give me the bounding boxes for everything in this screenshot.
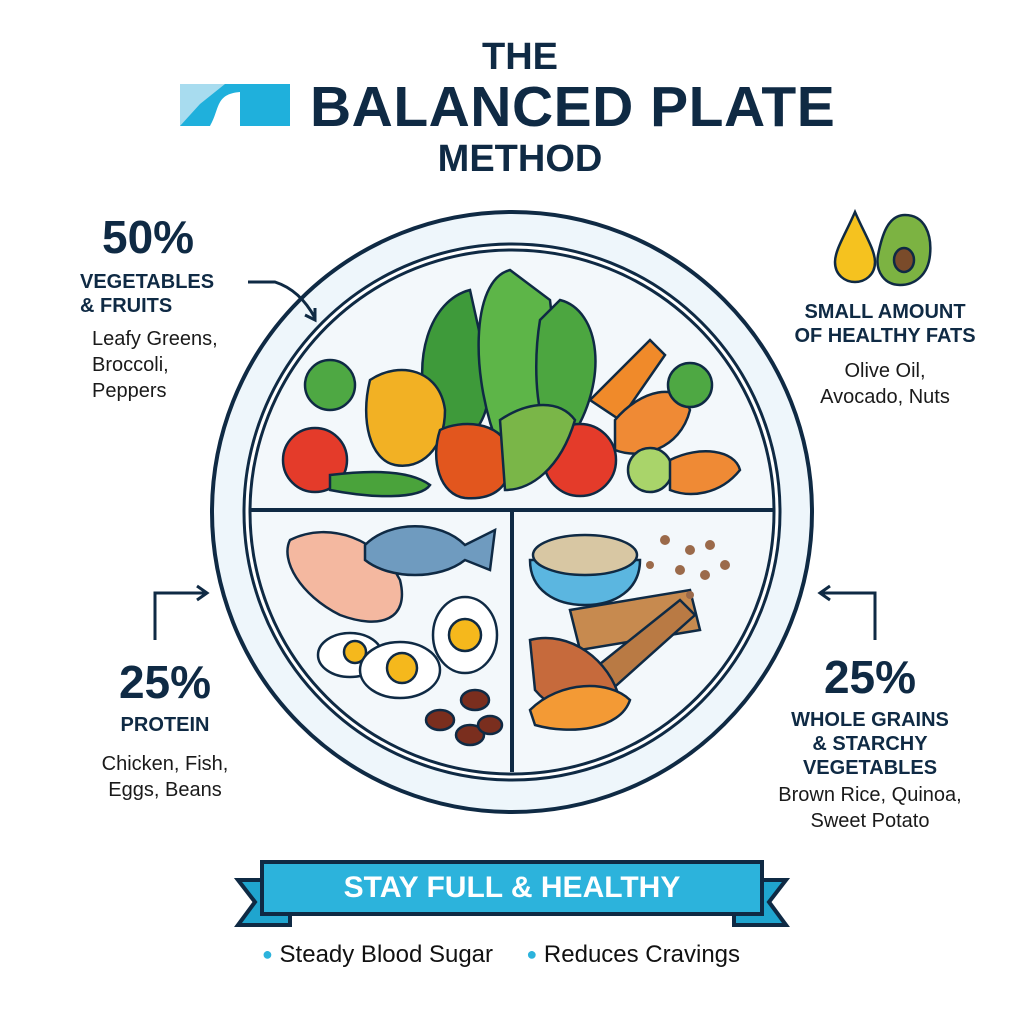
50% text	[80, 211, 218, 402]
grains text: Brown Rice, Quinoa,	[778, 784, 962, 806]
grains text: WHOLE GRAINS	[791, 709, 949, 731]
bullets: ● Steady Blood Sugar ● Reduces Cravings	[262, 941, 740, 968]
protein	[287, 526, 502, 745]
protein text: Chicken, Fish,	[102, 753, 228, 775]
grains text: & STARCHY	[812, 733, 928, 755]
title: THE: THE	[482, 36, 558, 78]
50% text: VEGETABLES	[80, 271, 214, 293]
banner text: STAY FULL & HEALTHY	[344, 871, 680, 904]
grains text	[778, 651, 962, 832]
fats text: OF HEALTHY FATS	[794, 325, 976, 347]
protein text: Eggs, Beans	[108, 779, 222, 801]
50% text: & FRUITS	[80, 295, 172, 317]
icon: logo block	[180, 84, 290, 126]
grains text: VEGETABLES	[803, 757, 937, 779]
vegetables	[283, 270, 740, 498]
grains text: Sweet Potato	[811, 810, 929, 832]
title: BALANCED PLATE: BALANCED PLATE	[310, 75, 835, 139]
banner	[238, 862, 786, 925]
grains	[530, 535, 730, 730]
fats text: Olive Oil,	[844, 360, 926, 382]
title	[180, 36, 835, 180]
protein text	[102, 656, 228, 801]
fats text: Avocado, Nuts	[820, 386, 950, 408]
arrows	[155, 282, 875, 640]
50% text: Peppers	[92, 380, 166, 402]
fats text	[794, 301, 976, 408]
title: METHOD: METHOD	[438, 138, 602, 180]
50% text: Broccoli,	[92, 354, 169, 376]
protein text: PROTEIN	[121, 714, 209, 736]
protein text: 25%	[119, 656, 211, 708]
50% text: 50%	[102, 211, 194, 263]
grains text: 25%	[824, 651, 916, 703]
50% text: Leafy Greens,	[92, 328, 218, 350]
fats text: SMALL AMOUNT	[804, 301, 966, 323]
icon: oil drop & avocado	[835, 212, 930, 285]
